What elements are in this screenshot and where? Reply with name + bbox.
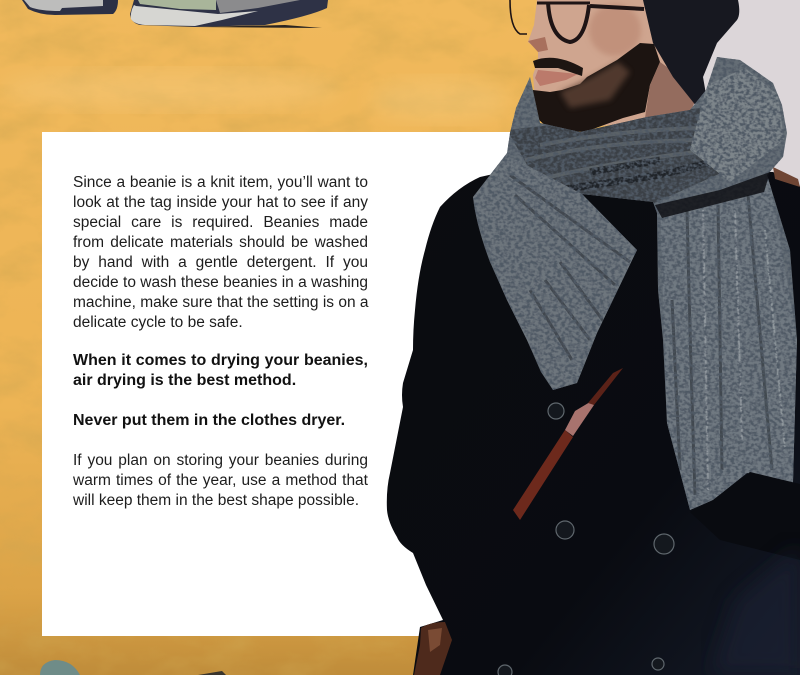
leather bag at hip (414, 622, 452, 675)
lips (535, 70, 578, 86)
left hanging tail (473, 155, 637, 390)
body text: Since a beanie is a knit item, you’ll want to (73, 174, 368, 191)
grey knit scarf (460, 50, 800, 520)
body text: When it comes to drying your beanies, (73, 352, 368, 369)
body text: will keep them in the best shape possible. (73, 492, 359, 509)
dark fold under knot (655, 172, 770, 218)
navy coat folds (710, 545, 800, 675)
man photo cut-out (387, 0, 800, 675)
grey wall behind the man (690, 0, 800, 192)
coat buttons (498, 403, 674, 675)
body text: look at the tag inside your hat to see if any (73, 194, 368, 211)
icon: right shoe (130, 0, 328, 28)
body text: decide to wash these beanies in a washing (73, 274, 368, 291)
body text: air drying is the best method. (73, 372, 296, 389)
body text: from delicate materials should be washed (73, 234, 368, 251)
body text: special care is required. Beanies made (73, 214, 368, 231)
glasses (510, 0, 644, 42)
face (528, 0, 695, 130)
knot (690, 68, 784, 182)
body text (73, 174, 369, 509)
body text: Never put them in the clothes dryer. (73, 412, 345, 429)
cross-body leather strap (513, 368, 623, 520)
icon: left shoe (22, 0, 118, 15)
knit hat (643, 0, 739, 107)
body text: warm times of the year, use a method that (73, 472, 368, 489)
body text: If you plan on storing your beanies during (73, 452, 368, 469)
black sleeve cuff over scarf end (690, 472, 800, 560)
beard (532, 43, 660, 132)
right hanging tail (660, 180, 797, 510)
body text: delicate cycle to be safe. (73, 314, 243, 331)
body text: machine, make sure that the setting is on a (73, 294, 369, 311)
neck and ear (645, 62, 696, 118)
icon: shoe at bottom (40, 660, 226, 675)
coat (387, 168, 800, 675)
body text: by hand with a gentle detergent. If you (73, 254, 368, 271)
bag strap at shoulder (773, 167, 800, 187)
neck band shade (510, 108, 720, 203)
moustache (533, 58, 583, 76)
panel: white text card (42, 132, 522, 636)
